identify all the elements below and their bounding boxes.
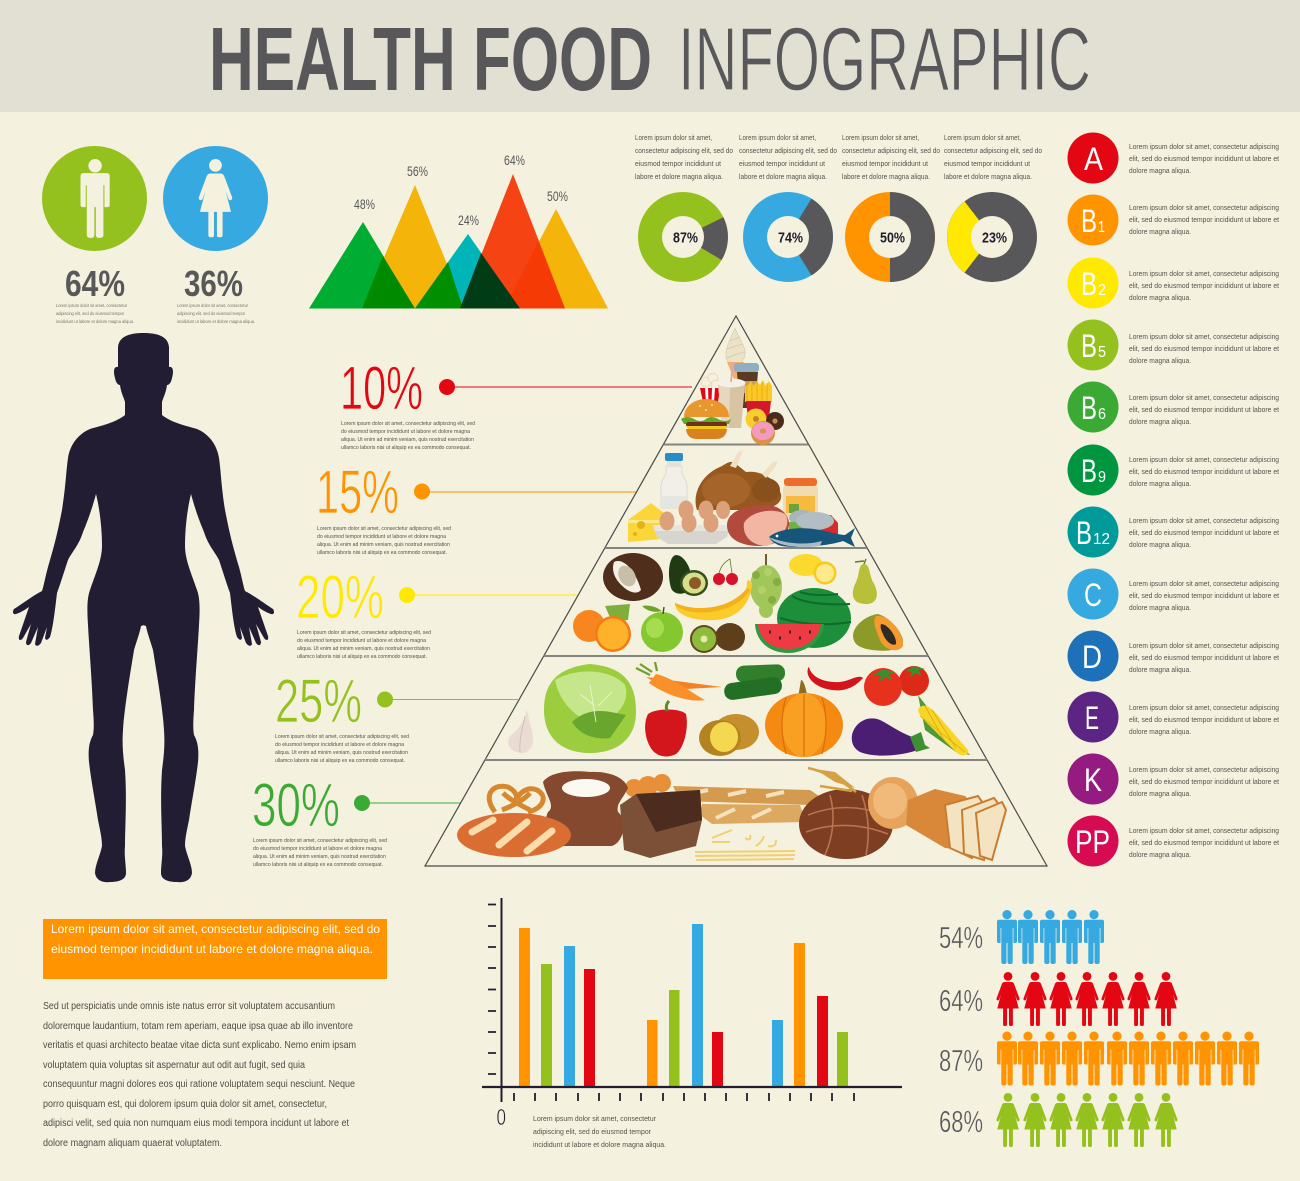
30% label: do eiusmod tempor incididunt ut labore et dolore magna	[253, 846, 382, 852]
vitamin E: Lorem ipsum dolor sit amet, consectetur adipiscing	[1129, 705, 1279, 712]
vitamin B2: B	[1081, 266, 1097, 302]
donut captions: labore et dolore magna aliqua.	[635, 174, 723, 181]
vitamin B5	[1068, 320, 1279, 370]
vitamin B6	[1068, 382, 1279, 432]
vitamin B5: elit, sed do eiusmod tempor incididunt ut labore et	[1129, 346, 1279, 353]
15% label: do eiusmod tempor incididunt ut labore et dolore magna	[317, 534, 446, 540]
pasta	[695, 830, 795, 860]
people pictograms	[939, 910, 1259, 1147]
vitamin B12: 12	[1093, 531, 1110, 548]
donut 87%: 87%	[673, 230, 698, 246]
vitamin A: elit, sed do eiusmod tempor incididunt ut labore et	[1129, 156, 1279, 163]
vitamin B1	[1068, 194, 1279, 246]
male caption: Lorem ipsum dolor sit amet, consectetur	[56, 303, 127, 308]
15% label: aliqua. Ut enim ad minim veniam, quis nostrud exercitation	[317, 542, 450, 548]
female percentage: 36%	[184, 263, 243, 304]
food pyramid	[425, 316, 1047, 866]
row 68%	[939, 1093, 1178, 1147]
chili pepper	[808, 667, 863, 690]
vitamin B1: elit, sed do eiusmod tempor incididunt ut labore et	[1129, 217, 1279, 224]
30% label	[252, 771, 460, 868]
donut captions: Lorem ipsum dolor sit amet,	[944, 135, 1021, 142]
row 87%: 87%	[939, 1043, 983, 1078]
tier: grains	[457, 768, 1006, 860]
vitamin B9: Lorem ipsum dolor sit amet, consectetur adipiscing	[1129, 457, 1279, 464]
body text block: voluptatem quia voluptas sit aspernatur aut odit aut fugit, sed quia	[43, 1060, 305, 1071]
pear	[853, 559, 877, 604]
triangle value labels: 48%	[354, 196, 375, 212]
20% label: Lorem ipsum dolor sit amet, consectetur adipiscing elit, sed	[297, 630, 431, 636]
triangle value labels: 56%	[407, 163, 428, 179]
tin cans	[789, 510, 838, 534]
vitamin B6: Lorem ipsum dolor sit amet, consectetur adipiscing	[1129, 395, 1279, 402]
vitamin B1: Lorem ipsum dolor sit amet, consectetur adipiscing	[1129, 205, 1279, 212]
icon: male figure in green circle	[42, 146, 147, 251]
donut captions: consectetur adipiscing elit, sed do	[739, 148, 837, 155]
body text block: veritatis et quasi architecto beatae vitae dicta sunt explicabo. Nemo enim ipsam	[43, 1040, 356, 1051]
ice cream	[726, 328, 745, 384]
15% label	[316, 458, 637, 556]
body text block: consequuntur magni dolores eos qui ratione voluptatem sequi nesciunt. Neque	[43, 1079, 355, 1090]
tier: fast food	[681, 328, 784, 445]
body text block: doloremque laudantium, totam rem aperiam, eaque ipsa quae ab illo inventore	[43, 1021, 353, 1032]
corn	[918, 695, 970, 755]
round bun	[868, 777, 918, 829]
burger	[681, 399, 731, 439]
triangle chart	[309, 152, 608, 308]
vitamin D: D	[1082, 639, 1102, 675]
female caption: adipiscing elit, sed do eiusmod tempor	[177, 311, 245, 316]
garlic	[508, 710, 533, 753]
potato	[699, 714, 759, 756]
row 54%	[939, 910, 1104, 964]
fries	[745, 380, 772, 418]
orange buns	[625, 774, 671, 797]
coconut	[603, 553, 663, 601]
flour sack	[543, 771, 628, 846]
donut captions: Lorem ipsum dolor sit amet,	[635, 135, 712, 142]
vitamin K	[1068, 754, 1279, 804]
donut 50%: 50%	[880, 230, 905, 246]
cucumbers	[723, 664, 785, 701]
pretzel	[489, 786, 543, 812]
pumpkin	[765, 680, 843, 757]
donut 87%	[638, 192, 728, 282]
vitamin C: elit, sed do eiusmod tempor incididunt ut labore et	[1129, 593, 1279, 600]
donut captions: eiusmod tempor incididunt ut	[635, 161, 721, 168]
carrots	[636, 662, 722, 701]
vitamin B1: B	[1081, 203, 1097, 239]
body text block: adipisci velit, sed quia non numquam eius modi tempora incidunt ut labore et	[43, 1118, 349, 1129]
orange callout	[43, 919, 387, 979]
vitamin B12: B	[1076, 515, 1092, 551]
10% label: do eiusmod tempor incididunt ut labore et dolore magna	[341, 429, 470, 435]
vitamin B5: dolore magna aliqua.	[1129, 358, 1191, 365]
chart caption: adipiscing elit, sed do eiusmod tempor	[533, 1129, 652, 1136]
10% label: ullamco laboris nisi ut aliquip ex ea commodo consequat.	[341, 445, 471, 451]
vitamin B9	[1068, 444, 1279, 496]
tier: protein and dairy	[628, 450, 855, 547]
round bread	[799, 789, 893, 859]
wheat	[808, 768, 856, 792]
vitamin B12	[1068, 506, 1279, 558]
tier: vegetables	[508, 662, 970, 757]
bell pepper	[645, 701, 687, 756]
vitamin C: Lorem ipsum dolor sit amet, consectetur adipiscing	[1129, 581, 1279, 588]
tier: fruit	[573, 553, 903, 653]
vitamin B12: Lorem ipsum dolor sit amet, consectetur adipiscing	[1129, 518, 1279, 525]
lemon	[789, 554, 836, 584]
avocado	[669, 555, 708, 596]
milk bottle	[661, 453, 687, 508]
orange callout: eiusmod tempor incididunt ut labore et dolore magna aliqua.	[51, 942, 373, 956]
vitamin D	[1068, 630, 1279, 682]
donut captions: consectetur adipiscing elit, sed do	[635, 148, 733, 155]
vitamin B2	[1068, 258, 1279, 308]
male caption	[56, 303, 134, 324]
vitamin D: dolore magna aliqua.	[1129, 667, 1191, 674]
kiwi	[690, 623, 745, 653]
vitamin A: dolore magna aliqua.	[1129, 168, 1191, 175]
banana	[675, 580, 752, 620]
female caption	[177, 303, 255, 324]
long bread	[457, 813, 571, 857]
male percentage: 64%	[65, 263, 125, 304]
roast chicken	[696, 450, 781, 510]
cabbage	[544, 664, 636, 753]
chart caption: Lorem ipsum dolor sit amet, consectetur	[533, 1116, 657, 1123]
vitamin PP: Lorem ipsum dolor sit amet, consectetur adipiscing	[1129, 828, 1279, 835]
header band	[0, 0, 1300, 112]
25% label: ullamco laboris nisi ut aliquip ex ea commodo consequat.	[275, 758, 405, 764]
vitamin A: Lorem ipsum dolor sit amet, consectetur adipiscing	[1129, 144, 1279, 151]
triangle value labels: 24%	[458, 212, 479, 228]
25% label: aliqua. Ut enim ad minim veniam, quis nostrud exercitation	[275, 750, 408, 756]
20% label: aliqua. Ut enim ad minim veniam, quis nostrud exercitation	[297, 646, 430, 652]
vitamin B9: B	[1081, 453, 1097, 489]
panel: vitamins list	[1068, 132, 1279, 866]
vitamin A	[1068, 132, 1279, 184]
vitamin B12: dolore magna aliqua.	[1129, 542, 1191, 549]
20% label: do eiusmod tempor incididunt ut labore et dolore magna	[297, 638, 426, 644]
male caption: incididunt ut labore et dolore magna aliqua.	[56, 319, 134, 324]
fish	[769, 528, 855, 547]
orange callout: Lorem ipsum dolor sit amet, consectetur adipiscing elit, sed do	[51, 922, 380, 936]
donut 50%	[845, 192, 935, 282]
vitamin B2: elit, sed do eiusmod tempor incididunt ut labore et	[1129, 283, 1279, 290]
vitamin C	[1068, 568, 1279, 620]
body text block: dolore magnam aliquam quaerat voluptatem.	[43, 1138, 222, 1149]
vitamin B9: dolore magna aliqua.	[1129, 481, 1191, 488]
donut captions: labore et dolore magna aliqua.	[739, 174, 827, 181]
vitamin C: C	[1084, 577, 1102, 613]
title: HEALTH FOOD	[209, 10, 652, 110]
vitamin K: K	[1084, 762, 1102, 798]
vitamin K: elit, sed do eiusmod tempor incididunt ut labore et	[1129, 779, 1279, 786]
donut captions	[635, 135, 1042, 181]
vitamin B6: dolore magna aliqua.	[1129, 419, 1191, 426]
vitamin K: Lorem ipsum dolor sit amet, consectetur adipiscing	[1129, 767, 1279, 774]
vitamin B2: dolore magna aliqua.	[1129, 295, 1191, 302]
bar chart	[482, 898, 902, 1149]
rye loaf	[620, 790, 702, 858]
donut captions: Lorem ipsum dolor sit amet,	[842, 135, 919, 142]
icon: female figure in blue circle	[163, 146, 268, 251]
row 64%	[939, 972, 1178, 1026]
triangle value labels	[354, 152, 568, 228]
vitamin B5: B	[1081, 328, 1097, 364]
15% label: 15%	[316, 458, 399, 526]
eggplant	[852, 718, 930, 756]
20% label	[296, 563, 577, 660]
watermelon	[755, 588, 851, 653]
donut captions: labore et dolore magna aliqua.	[944, 174, 1032, 181]
vitamin E: elit, sed do eiusmod tempor incididunt ut labore et	[1129, 717, 1279, 724]
vitamin B5: Lorem ipsum dolor sit amet, consectetur adipiscing	[1129, 334, 1279, 341]
cherries	[713, 559, 738, 585]
panel: male share	[42, 146, 147, 324]
donut 23%	[947, 192, 1037, 282]
25% label: Lorem ipsum dolor sit amet, consectetur adipiscing elit, sed	[275, 734, 409, 740]
female caption: Lorem ipsum dolor sit amet, consectetur	[177, 303, 248, 308]
donut 74%: 74%	[778, 230, 803, 246]
donut 23%: 23%	[982, 230, 1007, 246]
donut captions: Lorem ipsum dolor sit amet,	[739, 135, 816, 142]
panel: female share	[163, 146, 268, 324]
vitamin E: E	[1085, 700, 1099, 736]
25% label: do eiusmod tempor incididunt ut labore et dolore magna	[275, 742, 404, 748]
vitamin PP: PP	[1075, 824, 1110, 860]
vitamin PP	[1068, 816, 1279, 866]
row 64%: 64%	[939, 983, 983, 1018]
coffee cup	[734, 363, 759, 408]
ham	[727, 505, 789, 546]
row 54%: 54%	[939, 920, 983, 955]
vitamin D: Lorem ipsum dolor sit amet, consectetur adipiscing	[1129, 643, 1279, 650]
tomatoes	[864, 666, 929, 706]
chart caption	[533, 1116, 666, 1149]
donut 74%	[743, 192, 833, 282]
jar of preserves	[783, 478, 818, 517]
vitamin A: A	[1084, 141, 1104, 177]
10% label: Lorem ipsum dolor sit amet, consectetur adipiscing elit, sed	[341, 421, 475, 427]
vitamin C: dolore magna aliqua.	[1129, 605, 1191, 612]
10% label: aliqua. Ut enim ad minim veniam, quis nostrud exercitation	[341, 437, 474, 443]
vitamin B2: 2	[1098, 282, 1106, 299]
vitamin B6: elit, sed do eiusmod tempor incididunt ut labore et	[1129, 407, 1279, 414]
30% label: Lorem ipsum dolor sit amet, consectetur adipiscing elit, sed	[253, 838, 387, 844]
donuts	[746, 408, 784, 445]
body text block: Sed ut perspiciatis unde omnis iste natus error sit voluptatem accusantium	[43, 1001, 335, 1012]
vitamin B12: elit, sed do eiusmod tempor incididunt ut labore et	[1129, 530, 1279, 537]
body text block	[43, 1001, 356, 1149]
vitamin B6: 6	[1098, 406, 1106, 423]
triangle value labels: 64%	[504, 152, 525, 168]
vitamin B1: 1	[1098, 219, 1105, 236]
vitamin D: elit, sed do eiusmod tempor incididunt ut labore et	[1129, 655, 1279, 662]
popcorn	[700, 373, 721, 402]
25% label	[275, 667, 518, 764]
body text block: porro quisquam est, qui dolorem ipsum quia dolor sit amet, consectetur,	[43, 1099, 327, 1110]
15% label: Lorem ipsum dolor sit amet, consectetur adipiscing elit, sed	[317, 526, 451, 532]
baguettes	[673, 786, 822, 824]
vitamin PP: dolore magna aliqua.	[1129, 852, 1191, 859]
triangle value labels: 50%	[547, 188, 568, 204]
cheese	[628, 503, 673, 542]
donut captions: consectetur adipiscing elit, sed do	[842, 148, 940, 155]
donut captions: eiusmod tempor incididunt ut	[842, 161, 928, 168]
vitamin E	[1068, 692, 1279, 742]
10% label	[340, 354, 692, 451]
donut captions: consectetur adipiscing elit, sed do	[944, 148, 1042, 155]
vitamin K: dolore magna aliqua.	[1129, 791, 1191, 798]
30% label: ullamco laboris nisi ut aliquip ex ea commodo consequat.	[253, 862, 383, 868]
vitamin PP: elit, sed do eiusmod tempor incididunt ut labore et	[1129, 840, 1279, 847]
vitamin B2: Lorem ipsum dolor sit amet, consectetur adipiscing	[1129, 271, 1279, 278]
15% label: ullamco laboris nisi ut aliquip ex ea commodo consequat.	[317, 550, 447, 556]
male caption: adipiscing elit, sed do eiusmod tempor	[56, 311, 124, 316]
donut captions: eiusmod tempor incididunt ut	[944, 161, 1030, 168]
pyramid outline	[425, 316, 1047, 866]
row 87%	[939, 1032, 1259, 1086]
30% label: 30%	[252, 771, 340, 839]
vitamin B1: dolore magna aliqua.	[1129, 229, 1191, 236]
sliced bread	[906, 789, 1006, 860]
grapes	[750, 554, 782, 618]
papaya	[853, 614, 903, 651]
chart caption: incididunt ut labore et dolore magna aliqua.	[533, 1142, 666, 1149]
vitamin B6: B	[1081, 390, 1097, 426]
vitamin B9: 9	[1098, 469, 1106, 486]
egg tray	[653, 500, 730, 544]
female caption: incididunt ut labore et dolore magna aliqua.	[177, 319, 255, 324]
donut captions: labore et dolore magna aliqua.	[842, 174, 930, 181]
20% label: 20%	[296, 563, 384, 631]
donut captions: eiusmod tempor incididunt ut	[739, 161, 825, 168]
green apple	[641, 606, 683, 652]
vitamin E: dolore magna aliqua.	[1129, 729, 1191, 736]
human body silhouette	[13, 333, 274, 882]
title: INFOGRAPHIC	[678, 10, 1091, 110]
pyramid labels	[252, 354, 692, 868]
row 68%: 68%	[939, 1104, 983, 1139]
vitamin B9: elit, sed do eiusmod tempor incididunt ut labore et	[1129, 469, 1279, 476]
vitamin B5: 5	[1098, 344, 1106, 361]
20% label: ullamco laboris nisi ut aliquip ex ea commodo consequat.	[297, 654, 427, 660]
10% label: 10%	[340, 354, 423, 422]
25% label: 25%	[275, 667, 362, 735]
soda cup	[718, 362, 746, 428]
panel: donut charts	[635, 135, 1042, 282]
30% label: aliqua. Ut enim ad minim veniam, quis nostrud exercitation	[253, 854, 386, 860]
axis zero: 0	[496, 1104, 506, 1130]
oranges	[573, 604, 631, 652]
